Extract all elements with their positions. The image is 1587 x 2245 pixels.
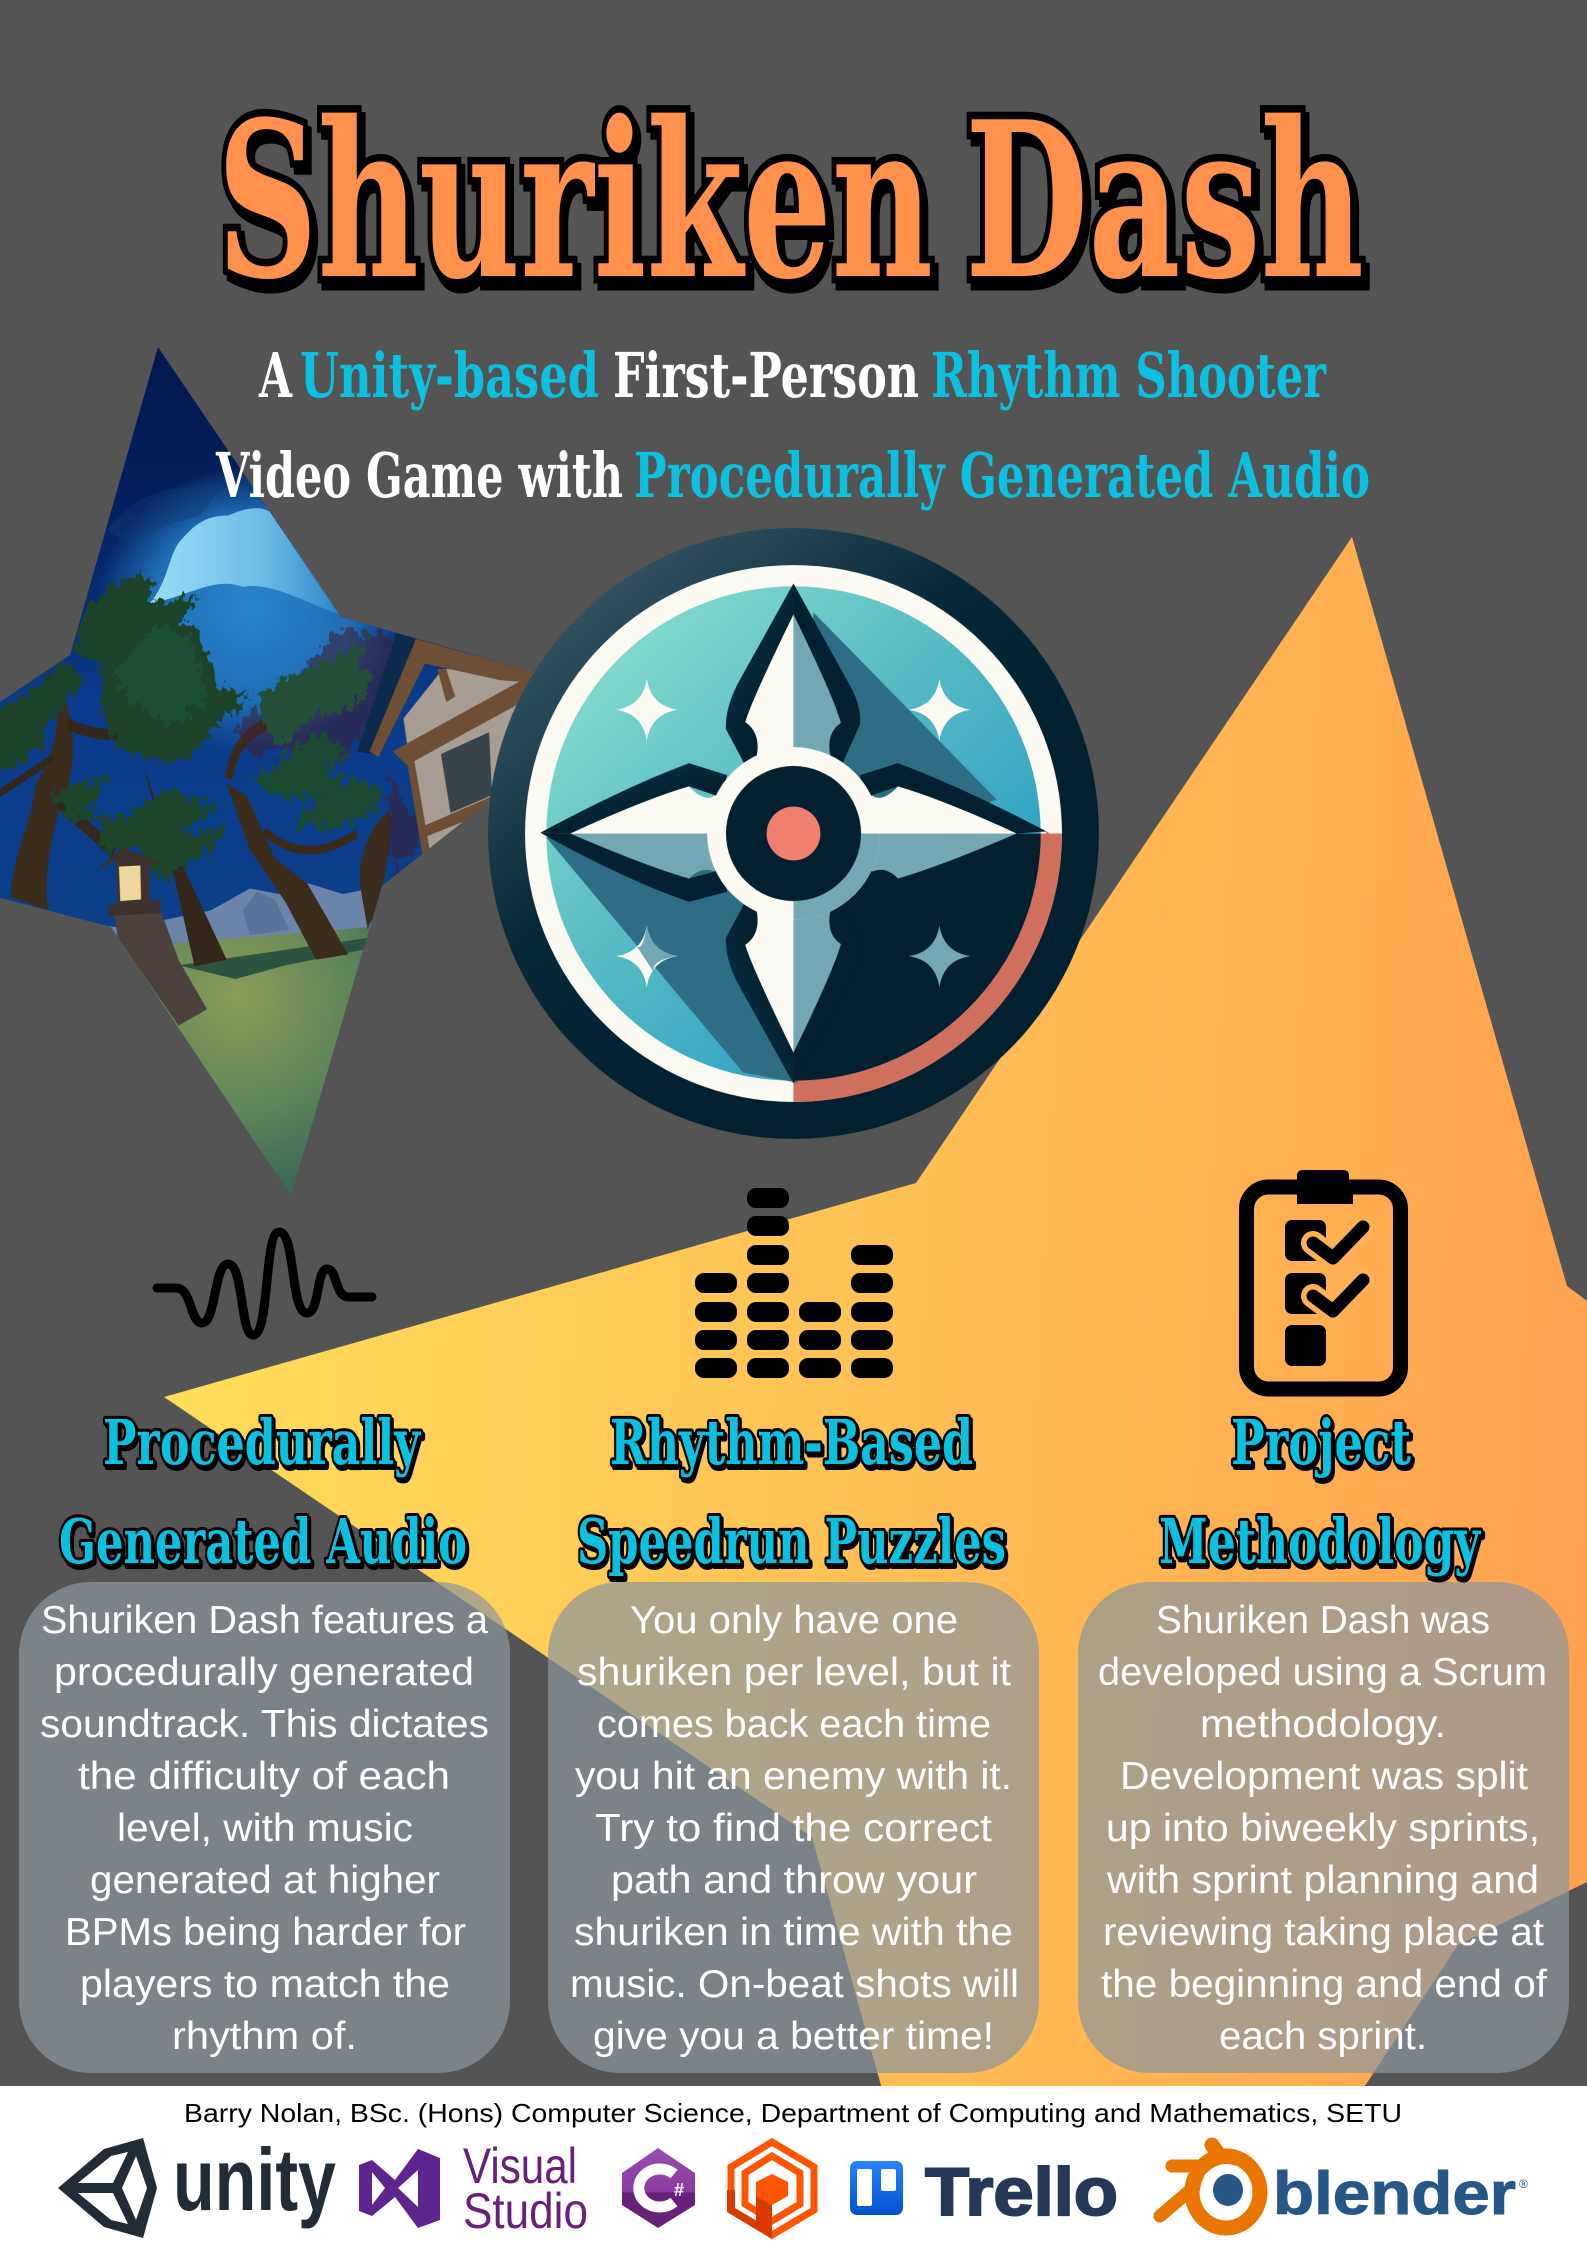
panel: procedurally generated audio text [19, 1582, 510, 2073]
subtitle: Video Game with [215, 439, 623, 512]
subtitle: First-Person [613, 339, 919, 412]
panel: procedurally generated audio text: the difficulty of each [78, 1755, 450, 1798]
heading: Rhythm-Based Speedrun Puzzles: Rhythm-Based [612, 1409, 975, 1482]
heading: Rhythm-Based Speedrun Puzzles [577, 1406, 1008, 1581]
logo: Trello: Trello [925, 2154, 1118, 2230]
panel: procedurally generated audio text: procedurally generated [54, 1651, 474, 1694]
subtitle: Rhythm Shooter [931, 339, 1327, 412]
shuriken logo [488, 528, 1099, 1139]
title: Shuriken Dash: Shuriken [217, 74, 933, 327]
panel: rhythm-based speedrun puzzles text [548, 1582, 1039, 2073]
logo: orange hexagon P [727, 2142, 814, 2239]
panel: project methodology text: developed using a Scrum [1098, 1651, 1547, 1694]
subtitle: A [258, 339, 293, 412]
logo: blender: ® [1519, 2177, 1528, 2191]
panel: procedurally generated audio text: generated at higher [90, 1859, 440, 1902]
icon: clipboard checklist [1246, 1170, 1400, 1389]
heading: Project Methodology: Project [1231, 1406, 1411, 1479]
icon: equalizer bars [695, 1188, 893, 1378]
title: Shuriken Dash: Shuriken [221, 81, 937, 334]
stars [616, 679, 971, 987]
heading: Rhythm-Based Speedrun Puzzles: Rhythm-Based [610, 1406, 973, 1479]
panel: procedurally generated audio text: soundtrack. This dictates [40, 1703, 489, 1746]
panel: procedurally generated audio text: BPMs being harder for [65, 1911, 466, 1954]
title: Shuriken Dash: Dash [965, 74, 1364, 327]
panel: rhythm-based speedrun puzzles text: You only have one [630, 1599, 958, 1642]
panel: rhythm-based speedrun puzzles text: path and throw your [611, 1859, 977, 1902]
heading: Project Methodology [1159, 1406, 1483, 1581]
panel: project methodology text: Development was split [1120, 1755, 1528, 1798]
panel: project methodology text: Shuriken Dash was [1156, 1599, 1490, 1642]
heading: Rhythm-Based Speedrun Puzzles: Speedrun Puzzles [579, 1508, 1008, 1581]
heading: Rhythm-Based Speedrun Puzzles: Speedrun Puzzles [577, 1505, 1006, 1578]
yellow-orange shuriken shape [164, 537, 1587, 2089]
subtitle: Unity-based [300, 339, 599, 412]
panel: procedurally generated audio text: Shuriken Dash features a [41, 1599, 488, 1642]
logo: unity: unity [173, 2130, 336, 2229]
footer band [0, 2086, 1587, 2245]
panel: project methodology text: the beginning and end of [1101, 1963, 1547, 2006]
panel: rhythm-based speedrun puzzles text: shuriken in time with the [574, 1911, 1013, 1954]
panel: project methodology text: reviewing taking place at [1103, 1911, 1544, 1954]
heading: Procedurally Generated Audio [59, 1406, 469, 1581]
heading: Project Methodology: Project [1233, 1409, 1413, 1482]
heading: Procedurally Generated Audio: Procedurally [105, 1409, 423, 1482]
heading: Procedurally Generated Audio: Generated Audio [59, 1505, 467, 1578]
panel: project methodology text: each sprint. [1219, 2015, 1427, 2058]
logo: Trello [850, 2154, 1118, 2230]
panel: project methodology text: with sprint planning and [1106, 1859, 1539, 1902]
subtitle [215, 339, 1370, 512]
panel: rhythm-based speedrun puzzles text: Try to find the correct [595, 1807, 992, 1850]
logo: blender [1160, 2145, 1528, 2228]
logo: Visual Studio: Visual [463, 2138, 577, 2194]
logo: unity [58, 2130, 336, 2238]
panel: rhythm-based speedrun puzzles text: comes back each time [597, 1703, 991, 1746]
panel: rhythm-based speedrun puzzles text: music. On-beat shots will [570, 1963, 1019, 2006]
author credit: Barry Nolan, BSc. (Hons) Computer Science, Department of Computing and Mathematics, SETU [184, 2098, 1402, 2128]
logo: Visual Studio [359, 2138, 588, 2239]
panel: procedurally generated audio text: players to match the [80, 1963, 450, 2006]
panel: procedurally generated audio text: level, with music [117, 1807, 413, 1850]
logo: C sharp [622, 2148, 695, 2228]
heading: Procedurally Generated Audio: Generated Audio [61, 1508, 469, 1581]
panel: rhythm-based speedrun puzzles text: you hit an enemy with it. [575, 1755, 1012, 1798]
panel: procedurally generated audio text: rhythm of. [172, 2015, 357, 2058]
icon: sound wave [157, 1232, 372, 1335]
logo: C sharp: # [674, 2180, 684, 2200]
title: Shuriken Dash: Dash [969, 81, 1368, 334]
panel: rhythm-based speedrun puzzles text: give you a better time! [593, 2015, 994, 2058]
heading: Procedurally Generated Audio: Procedurally [103, 1406, 421, 1479]
panel: project methodology text [1078, 1582, 1569, 2073]
game screenshot in shuriken shape [0, 340, 568, 1201]
logo: blender: blender [1273, 2160, 1516, 2227]
panel: project methodology text: up into biweekly sprints, [1106, 1807, 1540, 1850]
logo: Visual Studio: Studio [463, 2183, 588, 2239]
panel: project methodology text: methodology. [1200, 1703, 1446, 1746]
panel: rhythm-based speedrun puzzles text: shuriken per level, but it [577, 1651, 1011, 1694]
